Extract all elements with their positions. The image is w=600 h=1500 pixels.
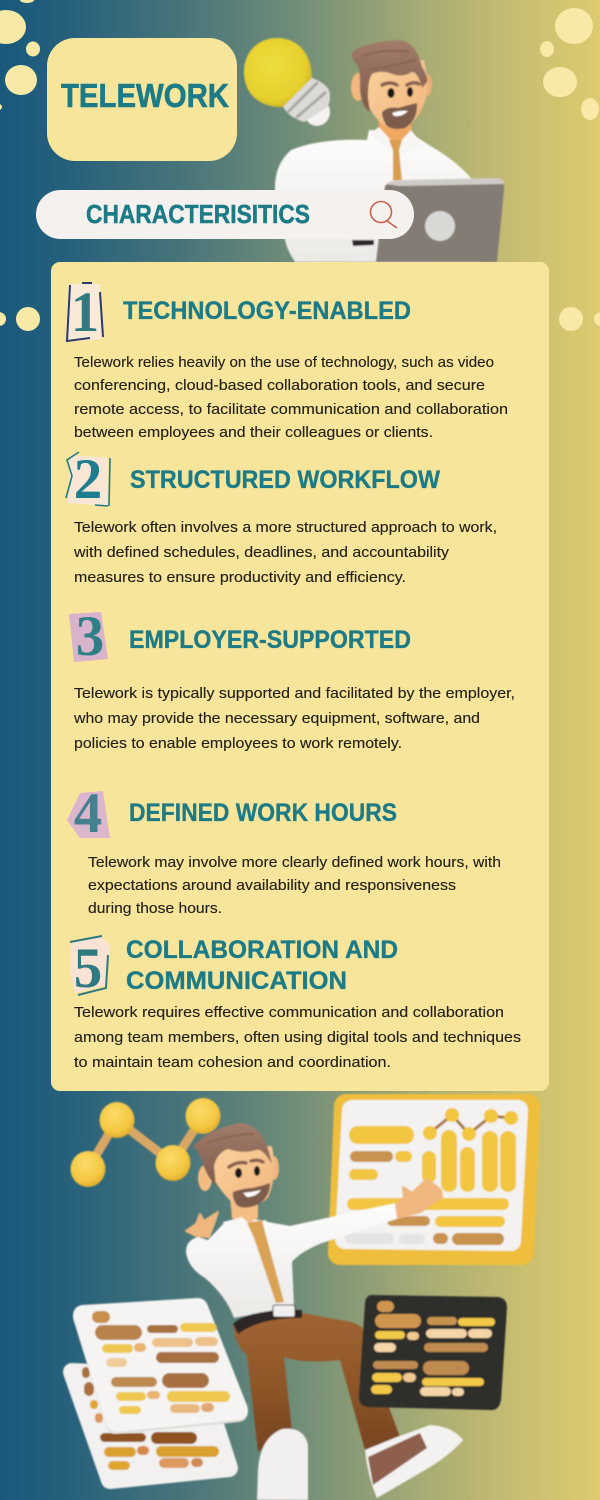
body 2: Telework often involves a more structured approach to work, [74, 520, 497, 536]
heading 1: TECHNOLOGY-ENABLED [123, 297, 411, 325]
neck [378, 118, 412, 148]
trousers [233, 1312, 400, 1452]
body 2: measures to ensure productivity and efficiency. [74, 570, 406, 586]
hair [193, 1123, 272, 1186]
front document [83, 1308, 238, 1424]
eyes [235, 1168, 242, 1178]
body 3 [73, 686, 515, 752]
chart bars [422, 1130, 516, 1192]
belt buckle [273, 1305, 295, 1317]
illustration: man with laptop [275, 40, 480, 262]
body 2: with defined schedules, deadlines, and accountability [73, 545, 450, 561]
body 2 [73, 520, 497, 586]
icon: molecule line chart [70, 1098, 220, 1187]
beard [382, 103, 417, 129]
illustration: laptop [376, 178, 504, 262]
ears [351, 73, 365, 101]
item 2: structured workflow [66, 448, 497, 586]
body 4: Telework may involve more clearly defined work hours, with [88, 855, 501, 871]
body 4: expectations around availability and responsiveness [88, 878, 456, 894]
eyes [387, 88, 395, 98]
belt [233, 1310, 302, 1334]
back document [72, 1367, 229, 1480]
body 4 [88, 855, 501, 917]
mouth [392, 111, 408, 116]
title panel [47, 38, 237, 161]
heading 2: STRUCTURED WORKFLOW [130, 466, 440, 494]
body 3: who may provide the necessary equipment, software, and [73, 711, 480, 727]
icon: magnifying glass [370, 202, 397, 228]
decorative dots: mid right [559, 307, 600, 331]
belt [352, 240, 374, 246]
board labels [345, 1126, 509, 1245]
body 3: policies to enable employees to work remotely. [74, 736, 402, 752]
hair [352, 40, 427, 112]
item 1: technology-enabled [66, 281, 508, 441]
decorative dots: top right [540, 8, 599, 120]
decorative dots: top left [0, 0, 40, 110]
badge number 4 [67, 782, 110, 845]
right hand [396, 1179, 442, 1218]
chart points [423, 1108, 518, 1141]
item 5: collaboration and communication [70, 936, 521, 1071]
mouth [243, 1190, 261, 1197]
torso and arms [186, 1203, 397, 1318]
heading 5 [126, 936, 398, 995]
heading 5: COMMUNICATION [126, 967, 347, 995]
body 5: to maintain team cohesion and coordination. [74, 1055, 391, 1071]
face [364, 60, 427, 129]
heading 5: COLLABORATION AND [126, 936, 398, 964]
beard [233, 1183, 270, 1208]
badge number 2: 2 [74, 448, 102, 511]
body 5: among team members, often using digital tools and techniques [74, 1030, 521, 1046]
title text: TELEWORK [61, 77, 229, 114]
badge number 4: 4 [74, 782, 102, 845]
left hand [186, 1212, 218, 1237]
badge number 1: 1 [71, 281, 99, 344]
badge number 3: 3 [76, 605, 104, 668]
front shoe [257, 1429, 308, 1500]
eyebrows [382, 83, 419, 85]
ears [198, 1165, 212, 1191]
body 5 [74, 1005, 521, 1071]
torso [275, 130, 480, 262]
body 1: remote access, to facilitate communication and collaboration [74, 402, 508, 418]
heading 4: DEFINED WORK HOURS [129, 799, 397, 827]
body 5: Telework requires effective communication and collaboration [74, 1005, 504, 1021]
body 1 [74, 355, 508, 441]
body 1: between employees and their colleagues or clients. [74, 425, 433, 441]
collar [369, 127, 424, 156]
dark board [359, 1295, 507, 1410]
body 1: Telework relies heavily on the use of technology, such as video [74, 355, 494, 371]
face [208, 1146, 274, 1207]
search text: CHARACTERISITICS [86, 199, 310, 229]
body 1: conferencing, cloud-based collaboration tools, and secure [74, 378, 485, 394]
badge number 2 [66, 448, 110, 511]
decorative dots: mid left [0, 307, 40, 331]
item 4: defined work hours [67, 782, 501, 917]
heading 3: EMPLOYER-SUPPORTED [129, 626, 411, 654]
collar [223, 1217, 270, 1232]
tie [389, 140, 402, 181]
chart board [340, 1106, 528, 1253]
panel: characteristics [51, 262, 549, 1091]
body 4: during those hours. [88, 901, 222, 917]
item 3: employer-supported [69, 605, 515, 752]
icon: light bulb [244, 38, 330, 126]
badge number 5: 5 [74, 937, 102, 1000]
chart line [430, 1115, 511, 1134]
back shoe [365, 1425, 463, 1498]
body 3: Telework is typically supported and facilitated by the employer, [74, 686, 515, 702]
tie [247, 1220, 284, 1303]
search bar [36, 190, 414, 239]
eyebrows [229, 1160, 263, 1167]
neck [230, 1197, 258, 1226]
illustration: man presenting [186, 1123, 463, 1500]
